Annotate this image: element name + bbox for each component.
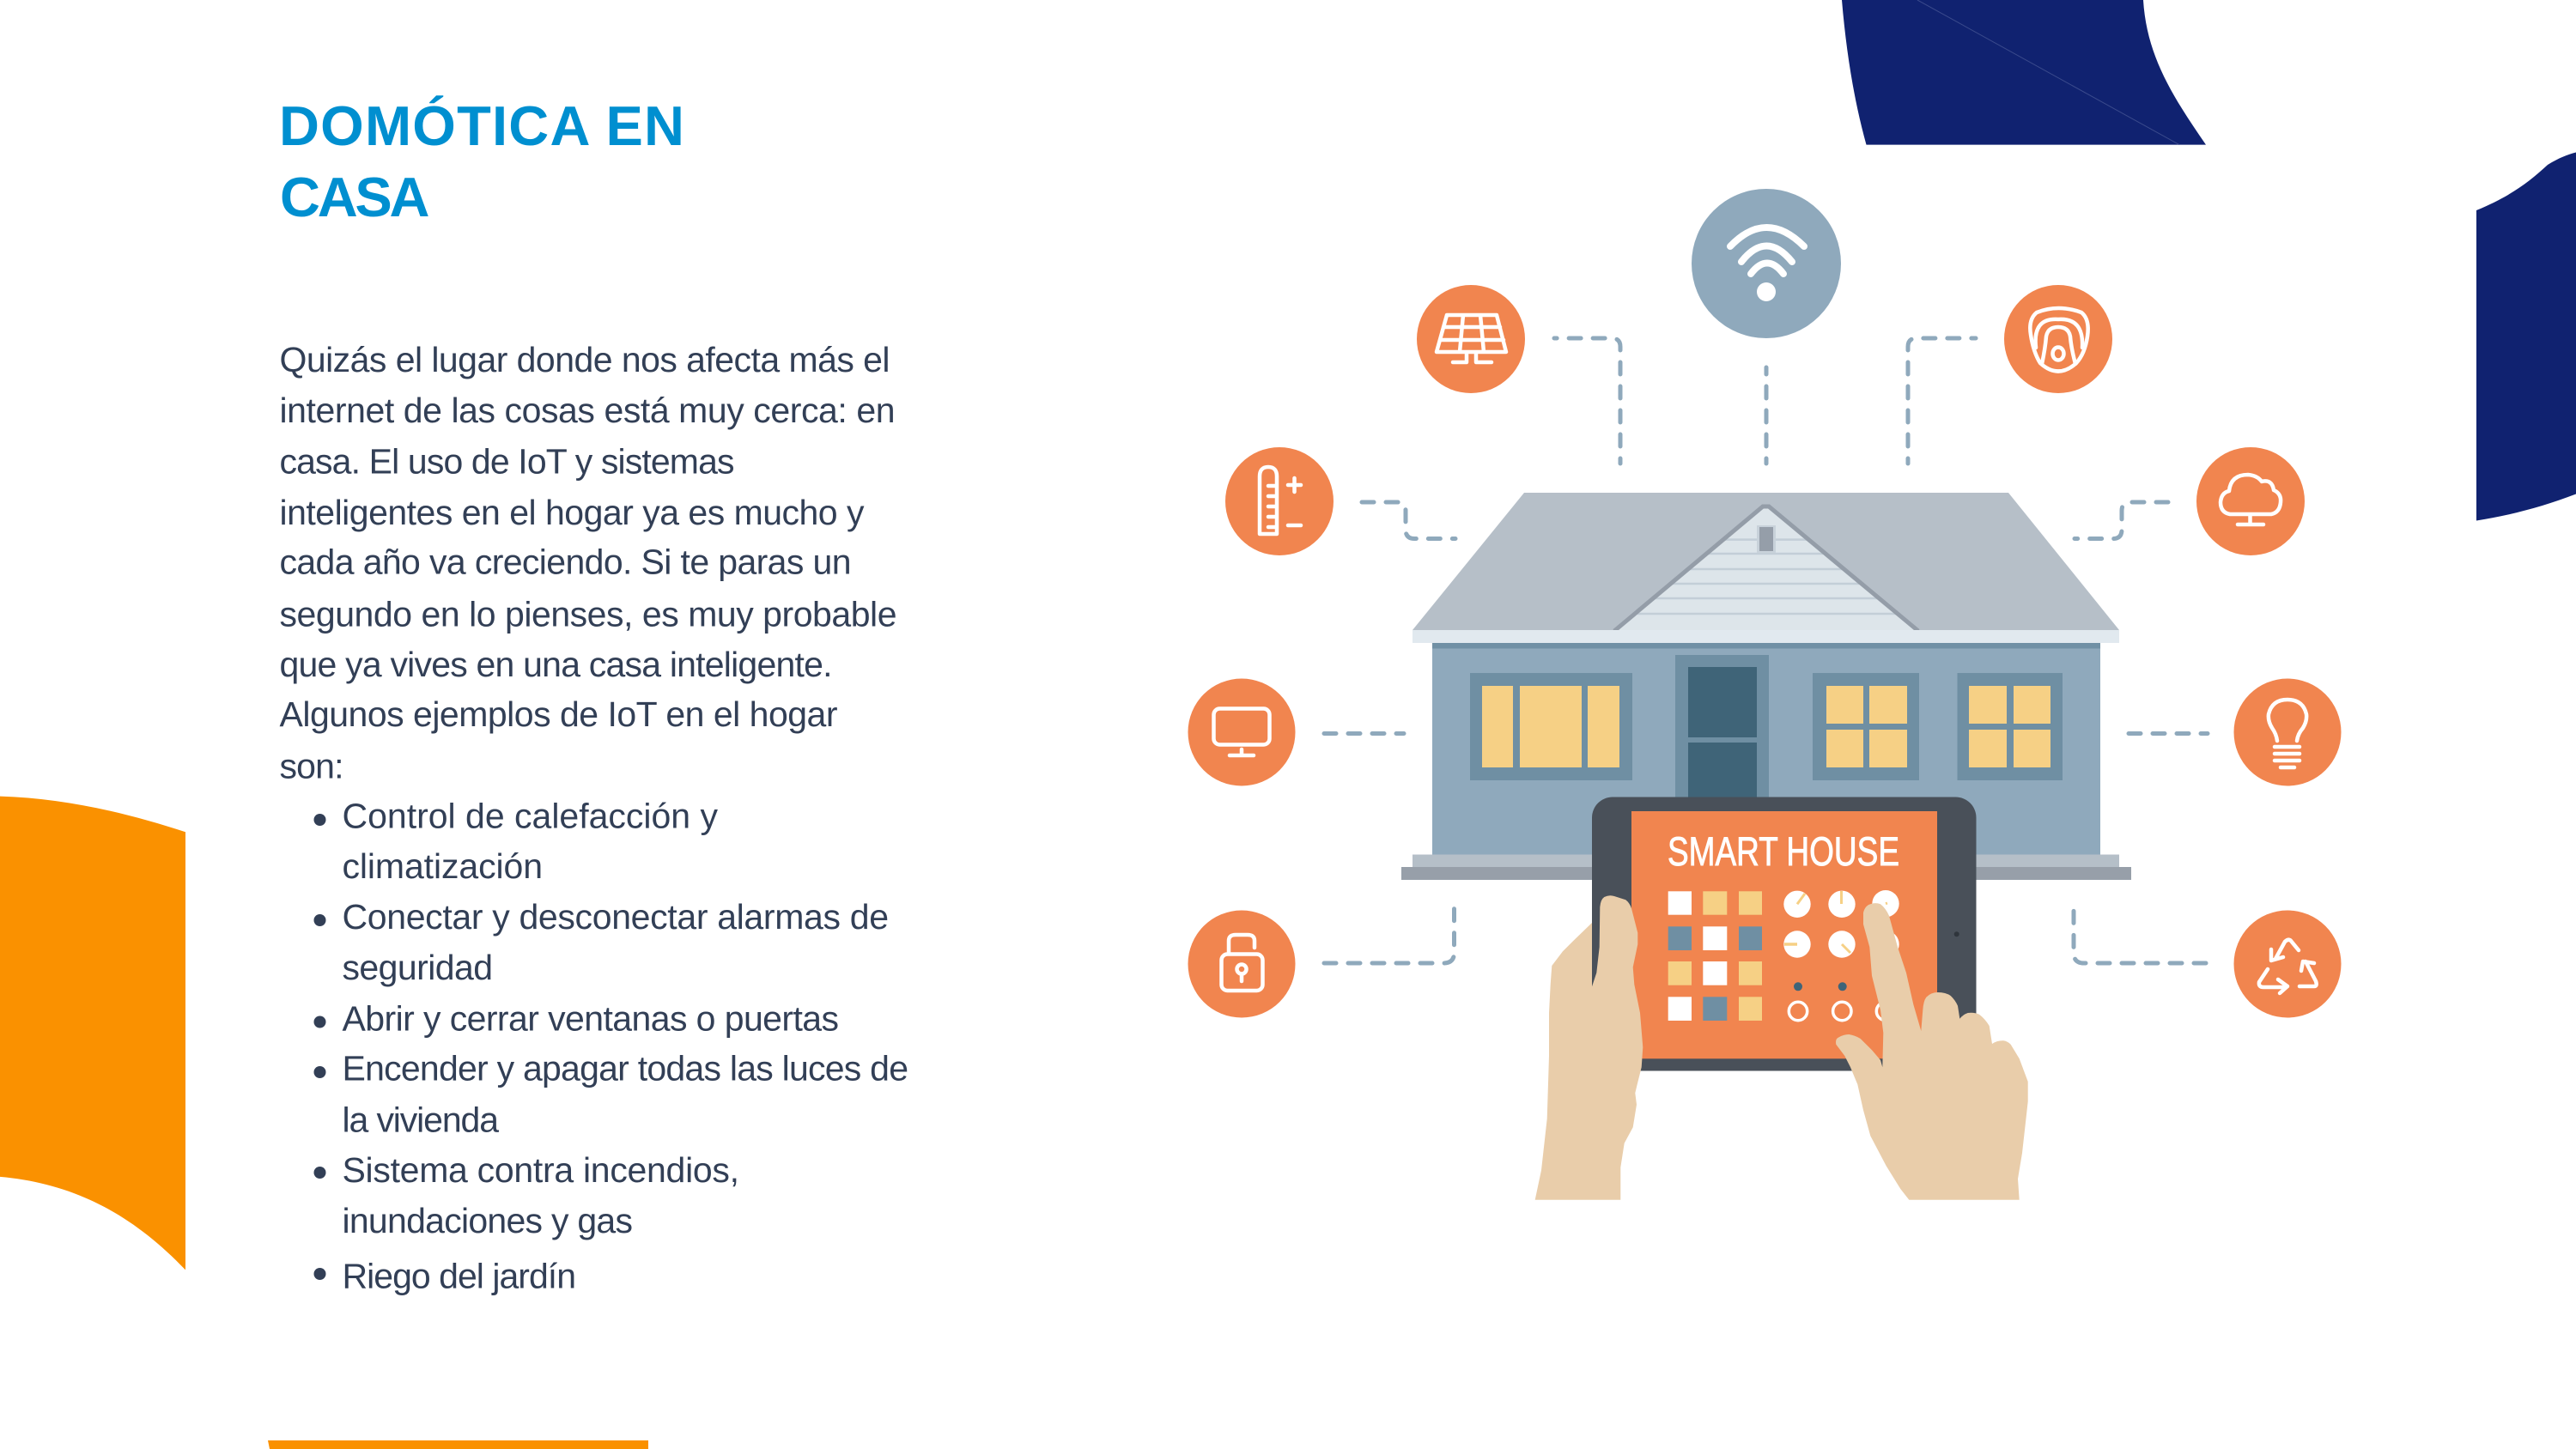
eave bbox=[1413, 630, 2119, 643]
intro paragraph: que ya vives en una casa inteligente. bbox=[280, 645, 833, 684]
tablet screen bbox=[1631, 811, 1937, 1058]
bullet list: Encender y apagar todas las luces de bbox=[342, 1049, 908, 1088]
tablet dials bbox=[1783, 890, 1899, 958]
tablet toggles bbox=[1789, 982, 1895, 1021]
intro paragraph: inteligentes en el hogar ya es mucho y bbox=[280, 493, 865, 532]
base bbox=[1401, 867, 2131, 880]
decorative orange shape left bbox=[0, 797, 185, 1270]
bullet list: climatización bbox=[342, 846, 543, 886]
icon: solar panel bbox=[1417, 285, 1525, 393]
dashed connectors bbox=[1324, 338, 2208, 963]
window right bbox=[1958, 673, 2063, 780]
bullet list: seguridad bbox=[342, 948, 493, 987]
bullet list: Conectar y desconectar alarmas de bbox=[342, 897, 889, 937]
decorative navy shape right bbox=[2476, 153, 2576, 520]
intro paragraph: casa. El uso de IoT y sistemas bbox=[280, 441, 735, 481]
title bbox=[279, 94, 684, 228]
icon: recycle bbox=[2234, 910, 2341, 1018]
decorative orange bar bottom bbox=[268, 1440, 648, 1449]
bullet list: Sistema contra incendios, bbox=[342, 1150, 739, 1190]
icon: thermometer bbox=[1225, 447, 1334, 555]
bullet list bbox=[314, 797, 908, 1296]
roof bbox=[1413, 493, 2119, 630]
door bbox=[1675, 655, 1769, 801]
icon: wifi bbox=[1692, 189, 1841, 338]
title: DOMÓTICA EN bbox=[279, 94, 684, 157]
icon: light bulb bbox=[2234, 678, 2341, 786]
icon: padlock bbox=[1188, 910, 1295, 1018]
gable bbox=[1614, 506, 1918, 631]
icon: security camera bbox=[2004, 285, 2112, 393]
window middle bbox=[1813, 673, 1919, 780]
tablet heading: SMART HOUSE bbox=[1668, 828, 1899, 874]
house bbox=[1401, 493, 2131, 880]
bullet list: Abrir y cerrar ventanas o puertas bbox=[342, 999, 839, 1039]
tablet camera bbox=[1954, 931, 1959, 937]
intro paragraph: segundo en lo pienses, es muy probable bbox=[280, 594, 896, 634]
left hand bbox=[1535, 895, 1643, 1200]
tablet squares bbox=[1668, 891, 1762, 1021]
intro paragraph: internet de las cosas está muy cerca: en bbox=[280, 391, 895, 430]
intro paragraph: son: bbox=[280, 747, 343, 786]
step bbox=[1413, 855, 2119, 867]
intro paragraph: cada año va creciendo. Si te paras un bbox=[280, 543, 852, 582]
icon: monitor bbox=[1188, 678, 1295, 786]
wall bbox=[1432, 643, 2100, 855]
tablet body bbox=[1592, 797, 1977, 1071]
intro paragraph bbox=[280, 340, 896, 786]
intro paragraph: Algunos ejemplos de IoT en el hogar bbox=[280, 694, 838, 734]
bullet list: la vivienda bbox=[342, 1100, 499, 1140]
decorative navy shape top bbox=[1842, 0, 2206, 145]
window left bbox=[1470, 673, 1632, 780]
icon: cloud bbox=[2196, 447, 2305, 555]
right hand bbox=[1836, 903, 2028, 1200]
bullet list: Riego del jardín bbox=[342, 1257, 576, 1296]
tablet bbox=[1592, 797, 1977, 1071]
title: CASA bbox=[280, 166, 429, 228]
bullet list: Control de calefacción y bbox=[342, 797, 718, 836]
intro paragraph: Quizás el lugar donde nos afecta más el bbox=[280, 340, 890, 379]
bullet list: inundaciones y gas bbox=[342, 1201, 633, 1240]
